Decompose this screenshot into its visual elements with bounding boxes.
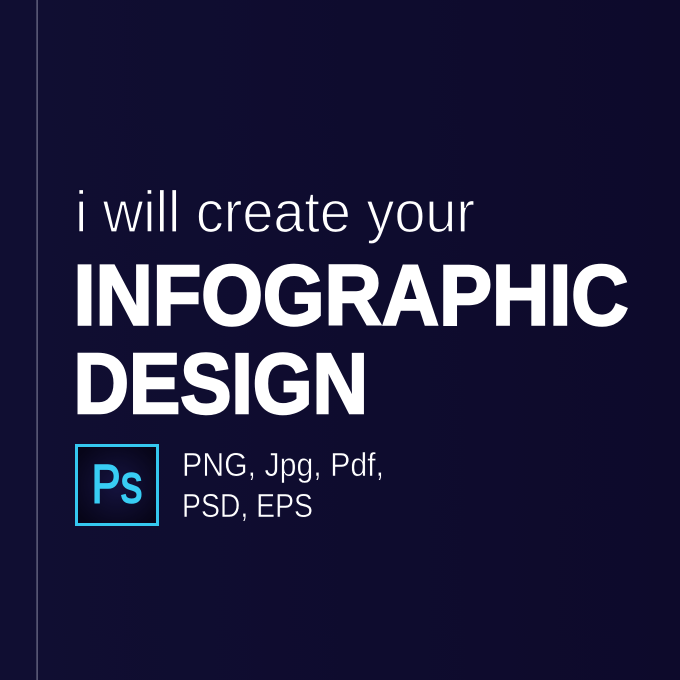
heading: design: DESIGN	[74, 336, 368, 432]
intro text: i will create your	[75, 180, 475, 245]
icon: photoshop	[76, 446, 158, 524]
heading: infographic: INFOGRAPHIC	[74, 248, 628, 344]
vertical line	[36, 0, 38, 680]
icon: photoshop: Ps	[92, 452, 142, 514]
file formats	[182, 446, 384, 524]
formats line one: PNG, Jpg, Pdf,	[182, 446, 384, 483]
formats line two: PSD, EPS	[182, 487, 313, 524]
